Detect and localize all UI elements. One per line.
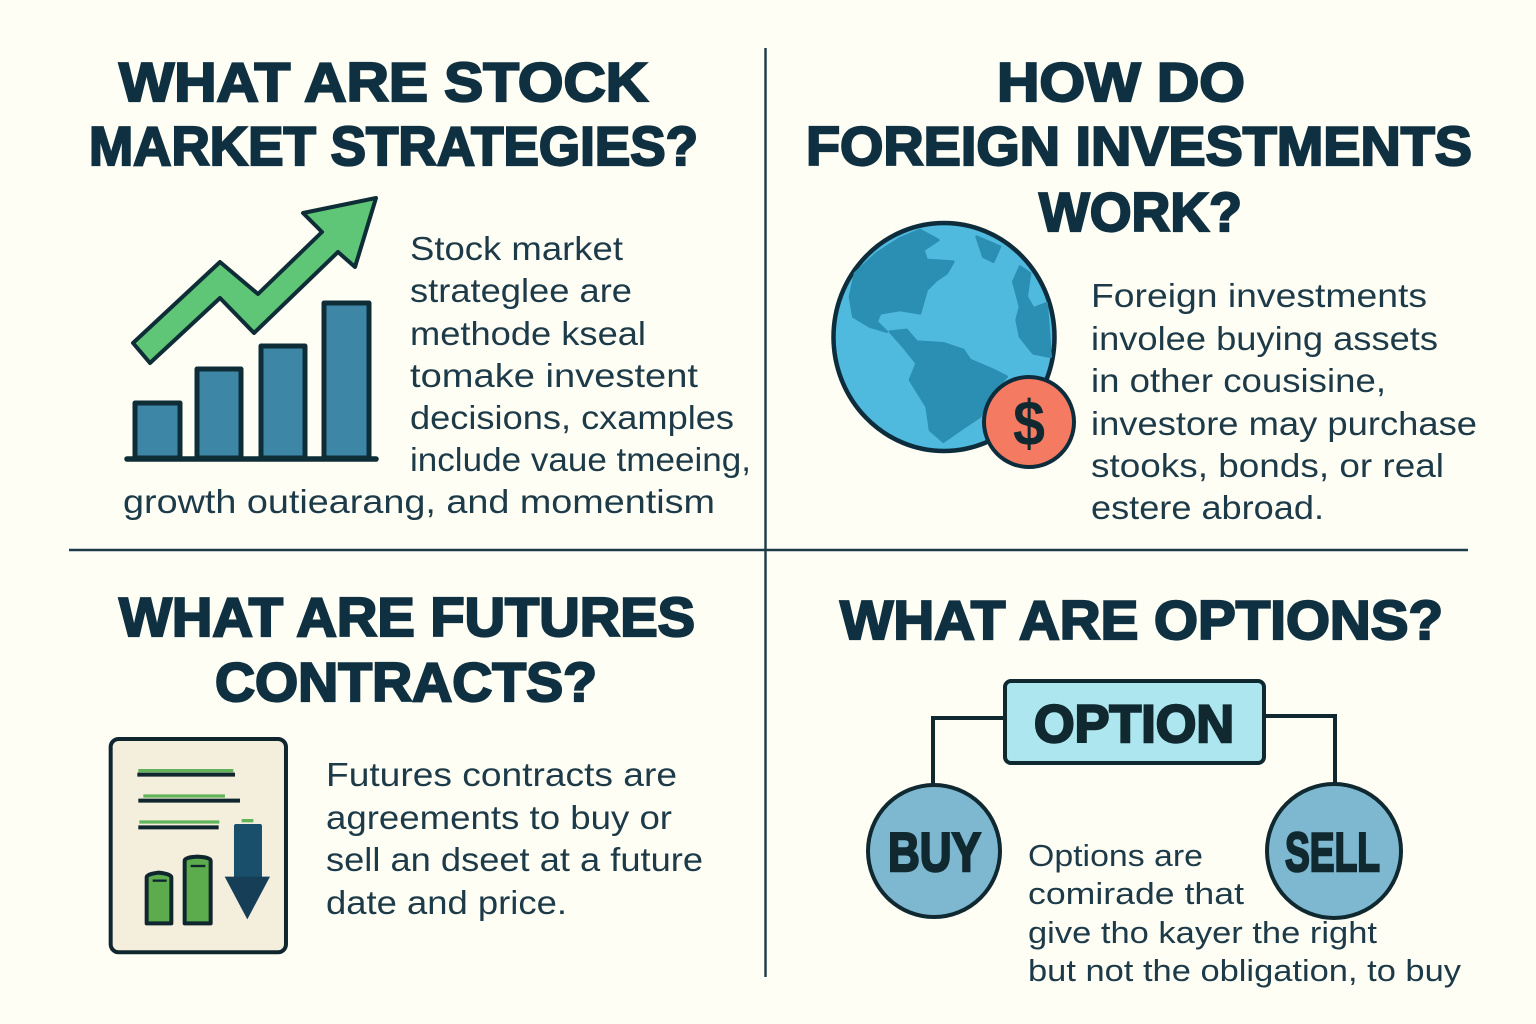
icon: green arrow (133, 198, 376, 363)
text: foreign investments description (1091, 277, 1477, 526)
text: options description: give tho kayer the right (1028, 915, 1377, 950)
text: options description: but not the obligation, to buy (1028, 953, 1462, 988)
heading: how do foreign investments work: HOW DO (997, 51, 1245, 113)
text: stock market strategies description: Stock market (410, 230, 623, 267)
icon: globe with dollar coin (834, 223, 1074, 467)
text: foreign investments description: estere abroad. (1091, 489, 1324, 526)
option box (1005, 681, 1264, 763)
heading: what are futures contracts: WHAT ARE FUTURES (119, 586, 695, 648)
text: foreign investments description: investore may purchase (1091, 405, 1477, 442)
bar chart (135, 303, 369, 458)
icon: contract document with bars and down arrow (111, 739, 286, 952)
text: foreign investments description: in other cousisine, (1091, 362, 1386, 399)
heading: what are options: WHAT ARE OPTIONS? (840, 589, 1443, 651)
heading: what are stock market strategies (89, 51, 698, 177)
text: stock market strategies description: strateglee are (410, 272, 632, 309)
text: options description (1028, 838, 1462, 988)
text: futures contracts description: agreements to buy or (326, 799, 672, 836)
text: stock market strategies description: include vaue tmeeing, (410, 441, 751, 478)
text: stock market strategies description (123, 230, 751, 520)
panel: options (840, 589, 1462, 988)
sell circle: SELL (1285, 821, 1380, 883)
text: futures contracts description: date and price. (326, 884, 567, 921)
text: stock market strategies description: decisions, cxamples (410, 399, 734, 436)
globe (834, 223, 1054, 451)
icon: dollar coin (984, 377, 1074, 467)
buy circle: BUY (888, 821, 981, 883)
icon: dollar coin: $ (1013, 387, 1045, 459)
heading: what are futures contracts: CONTRACTS? (215, 651, 597, 713)
heading: what are stock market strategies: WHAT ARE STOCK (119, 51, 648, 113)
text: futures contracts description: Futures contracts are (326, 756, 677, 793)
buy circle (868, 785, 1000, 917)
heading: what are stock market strategies: MARKET STRATEGIES? (89, 115, 698, 177)
text: options description: Options are (1028, 838, 1203, 873)
heading: how do foreign investments work: FOREIGN INVESTMENTS (806, 115, 1472, 177)
panel: stock market strategies (89, 51, 751, 520)
text: foreign investments description: Foreign investments (1091, 277, 1427, 314)
text: stock market strategies description: methode kseal (410, 315, 646, 352)
panel: futures contracts (111, 586, 703, 952)
heading: how do foreign investments work: WORK? (1039, 181, 1242, 243)
panel: foreign investments (806, 51, 1477, 526)
icon: rising bar chart with green arrow (127, 198, 376, 459)
text: stock market strategies description: growth outiearang, and momentism (123, 483, 715, 520)
text: foreign investments description: involee buying assets (1091, 320, 1438, 357)
heading: how do foreign investments work (806, 51, 1472, 243)
text: futures contracts description (326, 756, 703, 921)
text: stock market strategies description: tomake investent (410, 357, 698, 394)
option box: OPTION (1034, 695, 1234, 754)
text: futures contracts description: sell an dseet at a future (326, 841, 703, 878)
sell circle (1267, 784, 1401, 918)
text: options description: comirade that (1028, 876, 1244, 911)
heading: what are futures contracts (119, 586, 695, 713)
diagram: option branches to buy and sell (868, 681, 1401, 918)
text: foreign investments description: stooks, bonds, or real (1091, 447, 1444, 484)
